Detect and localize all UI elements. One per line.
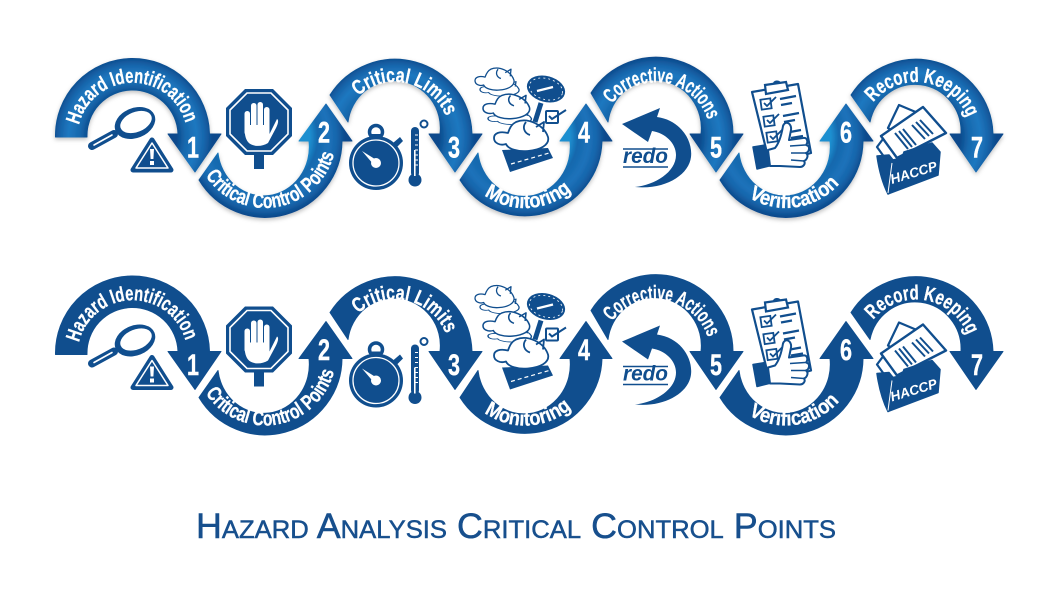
- arc: step 2 Critical Control Points: [198, 321, 352, 436]
- arc: step 6 Verification: [720, 321, 874, 436]
- arc: step 2 Critical Control Points: Critical Control Points: [208, 370, 334, 426]
- arc: step 6 Verification: Verification: [752, 395, 839, 426]
- icon: redo arrow: redo: [623, 362, 668, 386]
- icon: stopwatch: [349, 126, 403, 190]
- arc: step 2 Critical Control Points: 2: [318, 332, 330, 367]
- arc: step 7 Record Keeping: [849, 58, 1004, 176]
- arc: step 5 Corrective Actions: [589, 56, 744, 176]
- arc: step 4 Monitoring: Monitoring: [484, 182, 572, 208]
- title: Hazard Analysis Critical Control Points: [196, 507, 836, 546]
- arc: step 6 Verification: 6: [840, 115, 852, 149]
- arc: step 1 Hazard Identification: Hazard Identification: [66, 68, 196, 124]
- arc: step 7 Record Keeping: 7: [971, 347, 983, 382]
- arc: step 7 Record Keeping: Record Keeping: [864, 284, 977, 335]
- icon: clipboard with thumbs up: [752, 298, 811, 386]
- icon: redo arrow: redo: [623, 145, 668, 168]
- arc: step 2 Critical Control Points: 2: [318, 115, 330, 149]
- arc: step 1 Hazard Identification: 1: [187, 347, 199, 382]
- arc: step 7 Record Keeping: Record Keeping: [864, 66, 977, 118]
- icon: HACCP folder: [877, 105, 946, 194]
- icon: stop sign with hand: [226, 306, 292, 386]
- arc: step 4 Monitoring: 4: [578, 115, 590, 149]
- arc: step 6 Verification: [718, 104, 874, 222]
- arc: step 5 Corrective Actions: Corrective Actions: [603, 67, 718, 119]
- icon: stacked chickens with probe: [475, 286, 568, 390]
- arc: step 7 Record Keeping: 7: [971, 130, 983, 164]
- arc: step 6 Verification: 6: [840, 332, 852, 367]
- arc: step 5 Corrective Actions: Corrective Actions: [603, 284, 718, 336]
- icon: thermometer: [408, 120, 428, 186]
- icon: thermometer: [408, 338, 428, 404]
- arc: step 4 Monitoring: [458, 104, 614, 220]
- arc: step 3 Critical Limits: Critical Limits: [352, 286, 455, 332]
- arc: step 3 Critical Limits: Critical Limits: [352, 68, 455, 115]
- arc: step 4 Monitoring: Monitoring: [484, 400, 572, 426]
- icon: magnifying glass: [92, 319, 160, 364]
- arc: step 7 Record Keeping: [850, 276, 1004, 390]
- arc: step 2 Critical Control Points: Critical Control Points: [208, 152, 334, 208]
- icon: warning triangle: [133, 358, 171, 388]
- row: flat process flow: [55, 274, 1004, 436]
- icon: HACCP folder: HACCP: [889, 158, 940, 187]
- arc: step 4 Monitoring: 4: [578, 332, 590, 367]
- icon: stopwatch: [349, 343, 403, 408]
- arc: step 5 Corrective Actions: 5: [710, 130, 722, 164]
- arc: step 6 Verification: Verification: [752, 178, 839, 208]
- arc: step 3 Critical Limits: 3: [448, 347, 460, 382]
- arc: step 1 Hazard Identification: Hazard Identification: [66, 286, 196, 342]
- icon: stop sign with hand: [226, 89, 292, 169]
- arc: step 3 Critical Limits: 3: [448, 130, 460, 164]
- icon: HACCP folder: HACCP: [889, 376, 940, 404]
- icon: redo arrow: [622, 108, 691, 187]
- arc: step 4 Monitoring: [460, 321, 612, 434]
- icon: HACCP folder: [877, 322, 946, 412]
- arc: step 2 Critical Control Points: [197, 104, 354, 222]
- arc: step 3 Critical Limits: [330, 276, 482, 390]
- icon: stacked chickens with probe: [475, 68, 568, 172]
- icon: warning triangle: [133, 140, 171, 170]
- icon: redo arrow: [622, 326, 691, 405]
- arc: step 1 Hazard Identification: [55, 276, 222, 390]
- arc: step 5 Corrective Actions: [590, 274, 744, 390]
- icon: magnifying glass: [92, 101, 160, 146]
- arc: step 1 Hazard Identification: [52, 58, 222, 176]
- arc: step 1 Hazard Identification: 1: [187, 130, 199, 164]
- row: gradient process flow: [52, 56, 1004, 222]
- arc: step 3 Critical Limits: [328, 58, 484, 176]
- icon: clipboard with thumbs up: [752, 80, 811, 169]
- arc: step 5 Corrective Actions: 5: [710, 347, 722, 382]
